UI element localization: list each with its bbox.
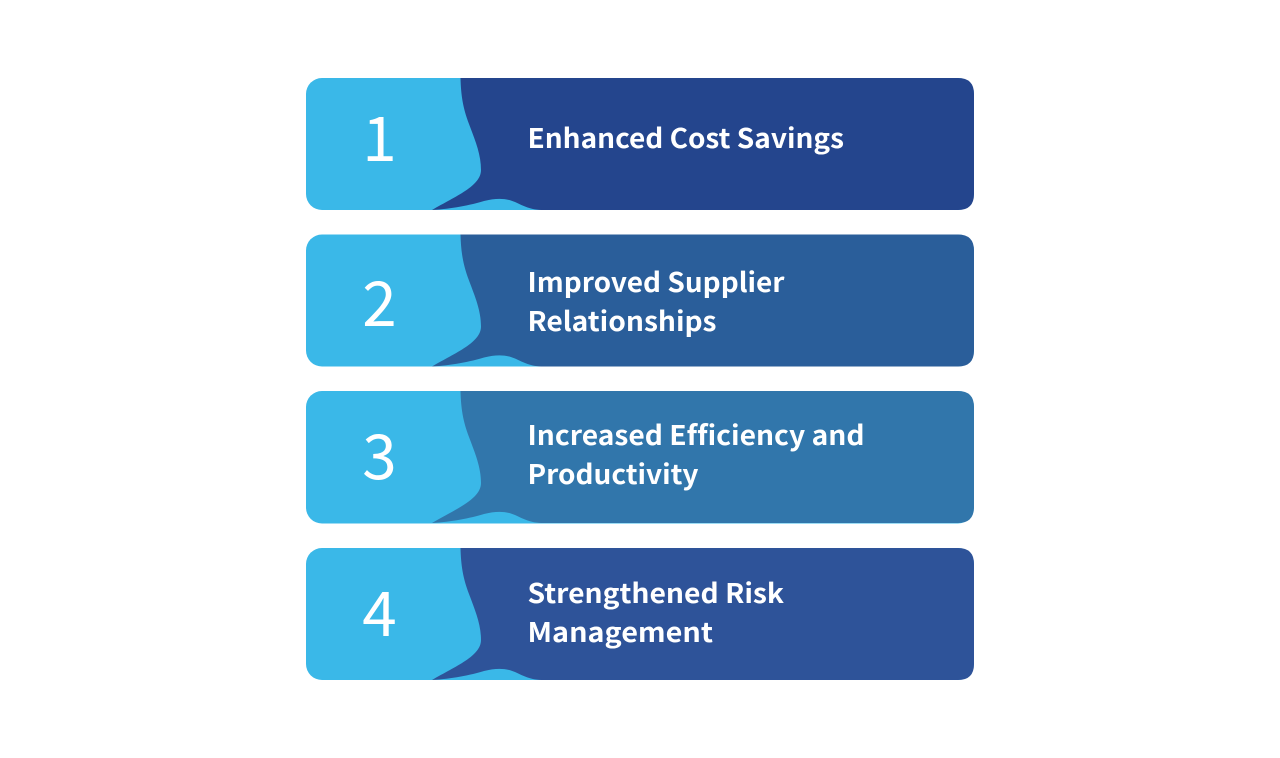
card 1: Enhanced Cost Savings: Enhanced Cost Savings (528, 117, 844, 156)
card 2: Improved Supplier Relationships: Improved Supplier (528, 261, 785, 300)
card 3: Increased Efficiency and Productivity: Increased Efficiency and (528, 414, 864, 453)
card 2: Improved Supplier Relationships: Relationships (528, 300, 716, 339)
card 4: Strengthened Risk Management: Strengthened Risk (528, 572, 785, 611)
card 1: Enhanced Cost Savings (306, 78, 974, 210)
card 4: Strengthened Risk Management: Management (528, 611, 713, 650)
card 4: Strengthened Risk Management: 4 (362, 564, 397, 654)
card 2: Improved Supplier Relationships (306, 234, 974, 366)
card 2: Improved Supplier Relationships: 2 (362, 254, 397, 344)
card 1: Enhanced Cost Savings: 1 (362, 89, 397, 179)
card 3: Increased Efficiency and Productivity: Productivity (528, 453, 699, 492)
card 3: Increased Efficiency and Productivity: 3 (362, 407, 397, 497)
card 4: Strengthened Risk Management (306, 548, 974, 680)
card 3: Increased Efficiency and Productivity (306, 391, 974, 524)
